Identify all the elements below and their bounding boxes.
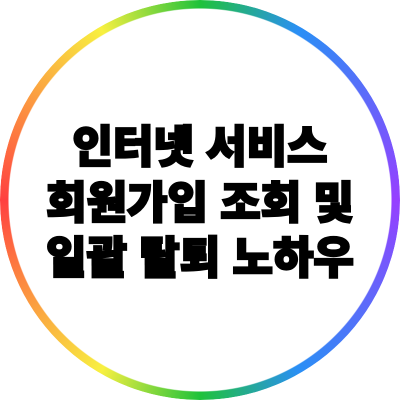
title line 2: 회원가입 조회 및 — [46, 178, 354, 228]
title line 3: 일괄 탈퇴 노하우 — [46, 234, 354, 283]
title line 1: 인터넷 서비스 — [72, 123, 328, 172]
